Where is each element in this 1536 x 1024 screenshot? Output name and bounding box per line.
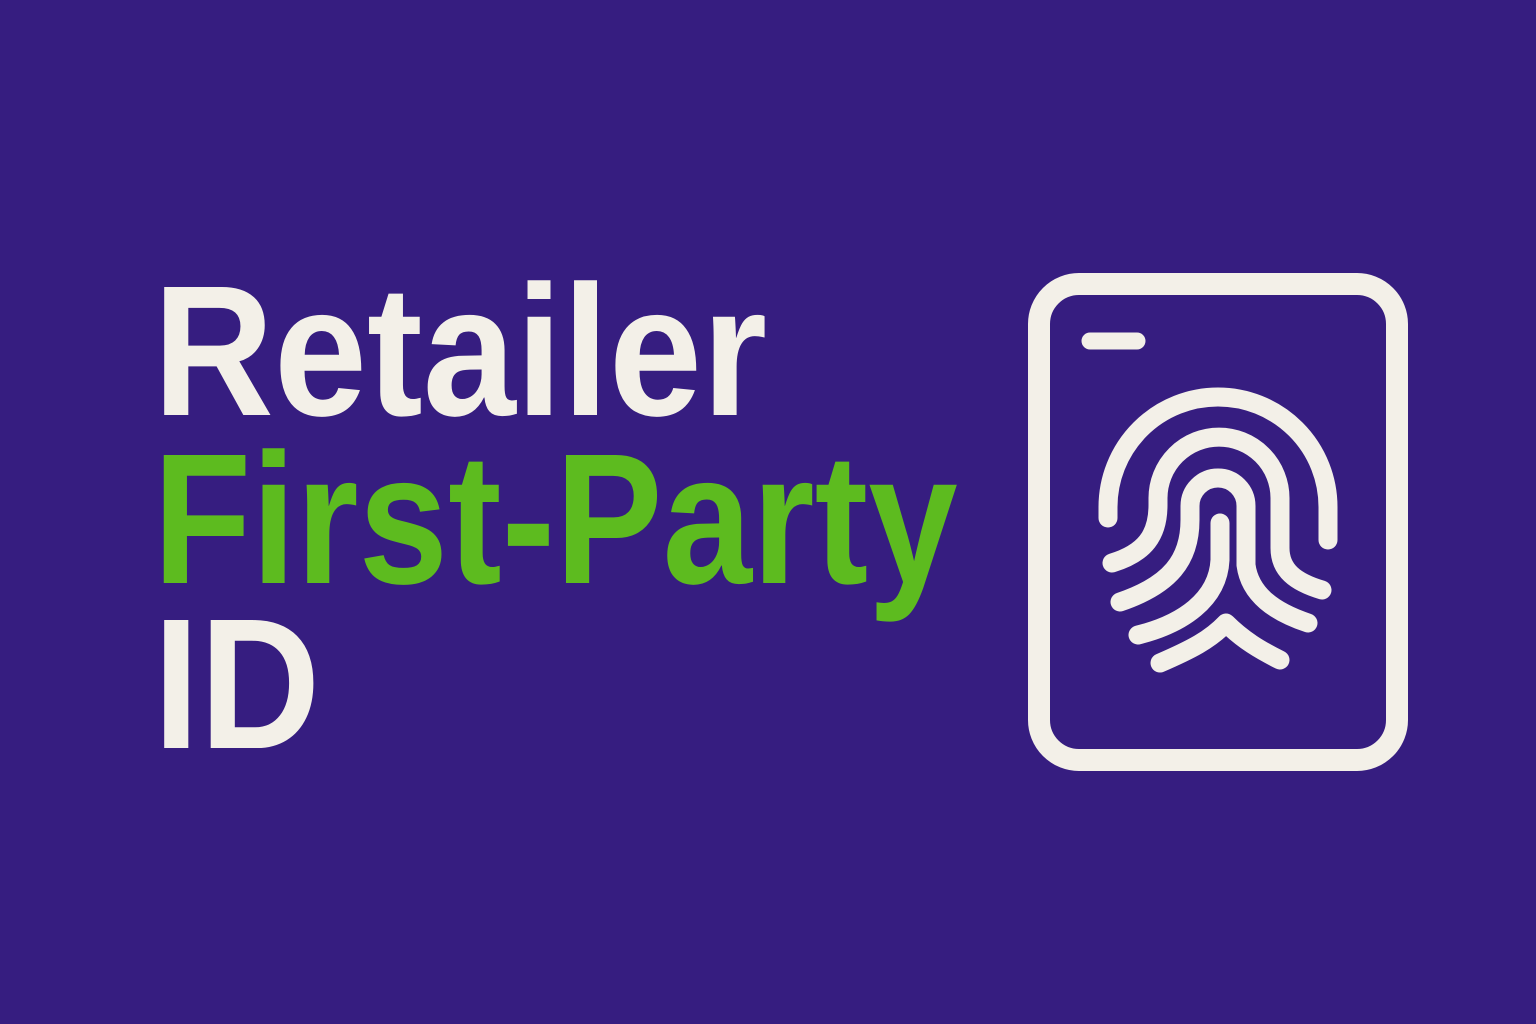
icon dash bbox=[1090, 332, 1137, 350]
title bbox=[153, 248, 958, 788]
title line: First-Party: First-Party bbox=[153, 416, 958, 623]
title line: Retailer: Retailer bbox=[153, 248, 767, 455]
title line: ID: ID bbox=[153, 581, 320, 788]
fingerprint bbox=[1108, 397, 1328, 663]
icon frame bbox=[1039, 284, 1397, 760]
